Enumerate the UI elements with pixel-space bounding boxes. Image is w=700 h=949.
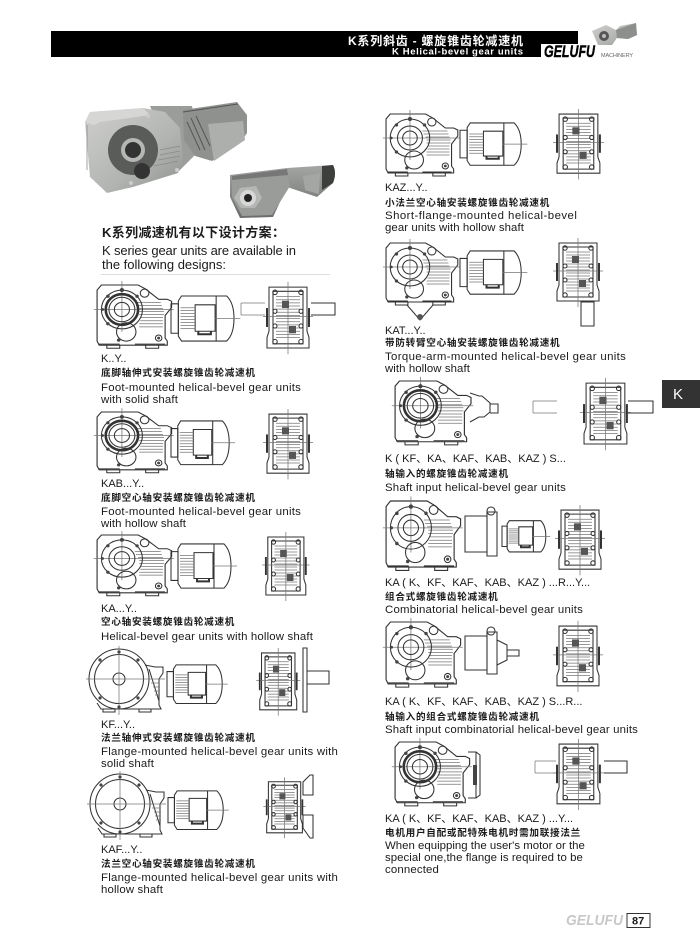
item: KAT...Y..	[383, 238, 626, 375]
item: KA (K, KF, KAF, KAB, KAZ) ...R...Y...: KA ( K、KF、KAF、KAB、KAZ ) ...R...Y...	[385, 577, 590, 589]
item: KAF...Y..: 法兰空心轴安装螺旋锥齿轮减速机	[101, 858, 256, 870]
item: K (KF, KA, KAF, KAB, KAZ) S...: 轴输入的螺旋锥齿轮减速机	[385, 468, 509, 480]
item: KA (K, KF, KAF, KAB, KAZ) S...R...: Shaft input combinatorial helical-bevel gear units	[385, 724, 638, 736]
logo: GELUFU machinery	[544, 23, 637, 61]
item: KF...Y..	[86, 646, 338, 770]
item: K (KF, KA, KAF, KAB, KAZ) S...	[385, 377, 653, 494]
item: KA (K, KF, KAF, KAB, KAZ) ...R...Y...	[383, 497, 605, 616]
item: KAT...Y..: Torque-arm-mounted helical-bevel gear units	[385, 351, 626, 363]
item: K..Y..: 底脚轴伸式安装螺旋锥齿轮减速机	[101, 367, 256, 379]
item: KA...Y..: Helical-bevel gear units with hollow shaft	[101, 631, 314, 643]
drawing: side and end view with torque arm	[383, 238, 603, 326]
section tab: K: K	[673, 386, 683, 403]
icon: small gear unit	[592, 23, 637, 45]
item: KA (K, KF, KAF, KAB, KAZ) ...Y...: connected	[385, 864, 439, 876]
header banner: K Helical-bevel gear units	[392, 46, 523, 58]
logo: GELUFU machinery: GELUFU	[544, 42, 596, 61]
item: K (KF, KA, KAF, KAB, KAZ) S...: Shaft input helical-bevel gear units	[385, 482, 566, 494]
item: KAF...Y..: Flange-mounted helical-bevel gear units with	[101, 872, 338, 884]
item: KAZ...Y..: 小法兰空心轴安装螺旋锥齿轮减速机	[385, 197, 550, 209]
item: KAB...Y..: 底脚空心轴安装螺旋锥齿轮减速机	[101, 492, 256, 504]
item: KAB...Y..: KAB...Y..	[101, 478, 144, 490]
drawing: combined motor and end view	[383, 497, 605, 575]
item: KAZ...Y..: Short-flange-mounted helical-bevel	[385, 210, 577, 222]
logo: GELUFU machinery: MACHINERY	[601, 53, 633, 59]
drawing: combined input shaft and end view	[383, 618, 603, 692]
item: KAT...Y..: 带防转臂空心轴安装螺旋锥齿轮减速机	[385, 337, 560, 349]
item: KAB...Y..	[94, 408, 313, 530]
drawing: side and end view with input shaft	[392, 377, 653, 450]
heading: design options: K系列减速机有以下设计方案：	[102, 225, 285, 240]
item: K..Y..: Foot-mounted helical-bevel gear units	[101, 382, 301, 394]
heading: design options: the following designs:	[102, 257, 226, 272]
item: KAB...Y..: Foot-mounted helical-bevel gear units	[101, 506, 301, 518]
drawing: side and end view	[94, 281, 335, 354]
item: K..Y..	[94, 281, 335, 406]
heading: design options	[102, 225, 296, 272]
item: KF...Y..: solid shaft	[101, 758, 155, 770]
drawing: side and end view	[94, 531, 310, 601]
header banner: K系列斜齿 - 螺旋锥齿轮减速机	[348, 33, 523, 48]
item: KAF...Y..: hollow shaft	[101, 884, 164, 896]
item: K..Y..: K..Y..	[101, 353, 126, 365]
item: KA (K, KF, KAF, KAB, KAZ) S...R...	[383, 618, 638, 736]
item: KA (K, KF, KAF, KAB, KAZ) S...R...: KA ( K、KF、KAF、KAB、KAZ ) S...R...	[385, 696, 582, 708]
item: KA (K, KF, KAF, KAB, KAZ) ...Y...: When equipping the user's motor or the	[385, 840, 585, 852]
item: KA (K, KF, KAF, KAB, KAZ) ...R...Y...: 组合式螺旋锥齿轮减速机	[385, 591, 498, 603]
item: K..Y..: with solid shaft	[100, 394, 179, 406]
item: KAZ...Y..: gear units with hollow shaft	[385, 222, 525, 234]
item: KA (K, KF, KAF, KAB, KAZ) ...Y...: KA ( K、KF、KAF、KAB、KAZ ) ...Y...	[385, 813, 573, 825]
item: KAF...Y..: KAF...Y..	[101, 844, 142, 856]
item: KAZ...Y..: KAZ...Y..	[385, 182, 428, 194]
item: KA (K, KF, KAF, KAB, KAZ) S...R...: 轴输入的组合式螺旋锥齿轮减速机	[385, 711, 540, 723]
item: KA (K, KF, KAF, KAB, KAZ) ...R...Y...: Combinatorial helical-bevel gear units	[385, 604, 583, 616]
item: KA...Y..	[94, 531, 314, 643]
item: KA (K, KF, KAF, KAB, KAZ) ...Y...: special one,the flange is required to be	[385, 852, 583, 864]
item: KA...Y..: KA...Y..	[101, 603, 137, 615]
drawing: side and end view	[383, 109, 604, 179]
drawing: side and end view	[87, 771, 313, 840]
section tab: K	[662, 380, 700, 408]
item: K (KF, KA, KAF, KAB, KAZ) S...: K ( KF、KA、KAF、KAB、KAZ ) S...	[385, 453, 566, 465]
item: KAZ...Y..	[383, 109, 604, 234]
item: KA...Y..: 空心轴安装螺旋锥齿轮减速机	[101, 616, 235, 628]
item: KF...Y..: Flange-mounted helical-bevel gear units with	[101, 746, 338, 758]
item: KAF...Y..	[87, 771, 338, 896]
heading: design options: K series gear units are available in	[102, 243, 296, 258]
header banner	[51, 31, 578, 58]
item: KAT...Y..: KAT...Y..	[385, 325, 426, 337]
item: KAT...Y..: with hollow shaft	[384, 363, 471, 375]
item: KA (K, KF, KAF, KAB, KAZ) ...Y...: 电机用户自配或配特殊电机时需加联接法兰	[385, 827, 581, 839]
drawing: side view with connecting flange and end view	[392, 738, 627, 810]
drawing: side and end view	[94, 408, 313, 479]
footer: brand and page number: 87	[632, 916, 644, 928]
product photo: large gear motor	[85, 102, 247, 193]
product photo: small gear motor	[230, 165, 335, 218]
item: KA (K, KF, KAF, KAB, KAZ) ...Y...	[385, 738, 627, 876]
item: KAB...Y..: with hollow shaft	[100, 518, 187, 530]
footer: brand and page number: GELUFU	[566, 912, 624, 929]
item: KF...Y..: 法兰轴伸式安装螺旋锥齿轮减速机	[101, 732, 256, 744]
item: KF...Y..: KF...Y..	[101, 719, 135, 731]
drawing: side and end view	[86, 646, 329, 716]
